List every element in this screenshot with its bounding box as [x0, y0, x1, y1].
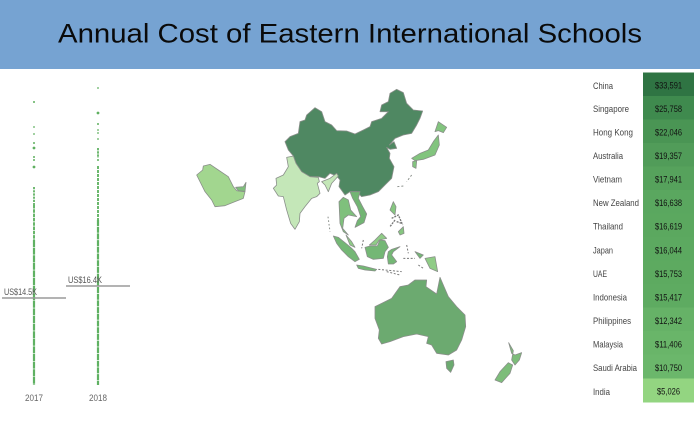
median line and label 2018: US$16.4K [68, 275, 103, 286]
median line and label 2017 [2, 287, 66, 298]
row: New Zealand: $16,638 [655, 198, 682, 209]
row: Thailand: $16,619 [655, 222, 682, 232]
row: Indonesia [593, 284, 694, 308]
row: Saudi Arabia: Saudi Arabia [593, 363, 638, 374]
row: Saudi Arabia: $10,750 [655, 363, 682, 374]
row: Australia [593, 143, 694, 167]
row: Singapore: $25,758 [655, 104, 682, 115]
country: Australia [375, 277, 466, 355]
strip 2017 [33, 101, 35, 385]
row: Japan: Japan [593, 246, 613, 256]
row: Australia: $19,357 [655, 151, 682, 162]
country: India [273, 156, 320, 229]
row: Indonesia: Indonesia [593, 292, 628, 304]
row: Philippines [593, 308, 694, 331]
year axis labels [25, 393, 107, 404]
country: Vietnam [350, 192, 367, 227]
country: Japan [412, 122, 447, 168]
row: UAE [593, 260, 694, 284]
row: Japan [593, 237, 694, 261]
row: Hong Kong: $22,046 [655, 128, 682, 138]
row: Saudi Arabia [593, 354, 694, 378]
row: Thailand [593, 214, 694, 237]
median line and label 2018 [66, 275, 130, 286]
country: India north-east [322, 173, 338, 192]
row: Malaysia [593, 331, 694, 355]
country: Indonesia [328, 217, 438, 275]
strip 2018 [97, 87, 99, 385]
country: China [285, 89, 423, 197]
row: Indonesia: $15,417 [655, 292, 682, 304]
row: Hong Kong [593, 120, 694, 143]
choropleth map [197, 89, 522, 383]
row: New Zealand [593, 190, 694, 214]
row: UAE: UAE [593, 269, 607, 280]
title banner: Annual Cost of Eastern International Schools [58, 18, 642, 48]
row: Philippines: Philippines [593, 316, 631, 327]
year axis labels: 2018 [89, 393, 107, 404]
row: Australia: Australia [593, 151, 624, 162]
outlying island specks [397, 175, 412, 187]
strip plot: cost distribution by year [2, 87, 130, 404]
row: Singapore: Singapore [593, 104, 629, 115]
row: India [593, 378, 694, 402]
row: Hong Kong: Hong Kong [593, 128, 633, 138]
row: Japan: $16,044 [655, 246, 682, 256]
row: India: India [593, 387, 611, 398]
row: New Zealand: New Zealand [593, 198, 639, 209]
row: Malaysia: Malaysia [593, 340, 624, 350]
row: China [593, 72, 694, 96]
country: Thailand [339, 197, 357, 235]
south map region [328, 192, 522, 383]
country: UAE [236, 182, 246, 191]
country: Malaysia [346, 233, 387, 247]
year axis labels: 2017 [25, 393, 43, 404]
north map region [197, 89, 447, 229]
country: Philippines [390, 202, 404, 235]
row: Vietnam: Vietnam [593, 174, 622, 186]
row: Vietnam: $17,941 [655, 174, 682, 186]
country: Saudi Arabia [197, 164, 245, 207]
row: India: $5,026 [657, 386, 680, 398]
row: Philippines: $12,342 [655, 316, 682, 327]
row: Thailand: Thailand [593, 222, 623, 232]
row: Vietnam [593, 166, 694, 190]
row: China: China [593, 81, 614, 92]
row: Malaysia: $11,406 [655, 340, 682, 350]
title banner [0, 0, 700, 69]
row: Singapore [593, 96, 694, 120]
country: Tasmania [446, 360, 454, 372]
cost table [593, 72, 694, 402]
row: UAE: $15,753 [655, 269, 682, 280]
median line and label 2017: US$14.5K [4, 287, 38, 298]
country: New Zealand [495, 343, 522, 383]
row: China: $33,591 [655, 80, 682, 92]
